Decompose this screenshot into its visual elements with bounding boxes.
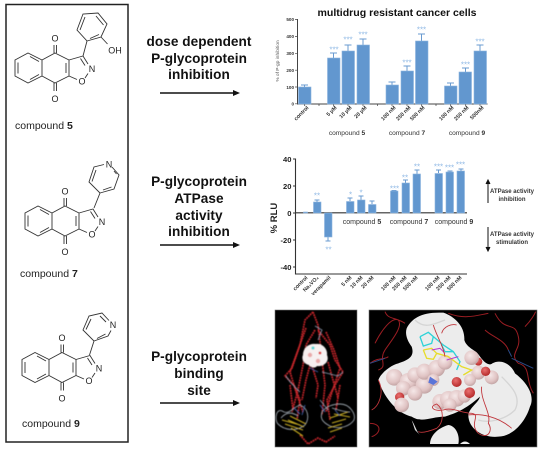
bar chart: multidrug resistant cancer cells: compound 9 <box>449 130 485 137</box>
bar chart: multidrug resistant cancer cells: *** <box>329 46 339 54</box>
bar chart: multidrug resistant cancer cells: 500nM <box>469 105 486 121</box>
bar chart: multidrug resistant cancer cells <box>275 17 488 137</box>
bar chart: ATPase activity % RLU: 100 nM <box>424 275 442 292</box>
heading: ATPase activity inhibition: P-glycoprotein <box>151 174 247 189</box>
bar chart: ATPase activity % RLU: ** <box>402 174 408 182</box>
arrow: to inhibition chart <box>160 90 240 96</box>
bar chart: ATPase activity % RLU: 500 nM <box>446 275 464 292</box>
molecule: compound 7: O <box>88 230 96 240</box>
bar chart: ATPase activity % RLU: Na₃VO₄ <box>302 275 321 293</box>
bar chart: ATPase activity % RLU: ** <box>325 246 332 254</box>
bar chart: multidrug resistant cancer cells: 250 nM <box>453 105 471 122</box>
molecule: compound 9: O <box>85 376 93 386</box>
bar chart: multidrug resistant cancer cells: 400 <box>286 34 294 39</box>
red backbone behind <box>370 312 536 437</box>
bar chart: ATPase activity % RLU: *** <box>445 164 454 172</box>
heading: binding site: binding <box>174 366 224 381</box>
label: ATPase activity inhibition: ATPase activity <box>490 189 535 195</box>
molecule: compound 7 <box>25 160 119 257</box>
bar chart: multidrug resistant cancer cells: 500 nM <box>409 105 427 122</box>
bar chart: multidrug resistant cancer cells: compound 7 <box>389 130 425 137</box>
bar chart: multidrug resistant cancer cells: *** <box>402 58 412 68</box>
label: compound 5: compound 5 <box>15 120 73 132</box>
bar chart: ATPase activity % RLU: *** <box>390 184 399 194</box>
molecule: compound 7: N <box>106 160 112 170</box>
bar chart: multidrug resistant cancer cells: *** <box>343 36 353 44</box>
molecule: compound 5: OH <box>108 46 122 56</box>
bar chart: ATPase activity % RLU: 500 nM <box>402 275 420 292</box>
chart title: multidrug resistant cancer cells <box>318 8 477 19</box>
heading: ATPase activity inhibition: activity <box>175 208 223 223</box>
bar chart: ATPase activity % RLU: * <box>349 190 352 200</box>
arrow: ATPase inhibition up <box>486 180 490 203</box>
label: compound 7: compound 7 <box>20 268 78 280</box>
label: compound 9: compound 9 <box>22 418 80 430</box>
arrow: ATPase stimulation down <box>486 227 490 251</box>
bar chart: multidrug resistant cancer cells: *** <box>461 60 470 70</box>
bar chart: multidrug resistant cancer cells: 20 µM <box>353 105 369 120</box>
bar chart: multidrug resistant cancer cells: 100 nM <box>380 105 398 122</box>
panel: binding site close-up <box>369 310 537 447</box>
bar chart: multidrug resistant cancer cells: 200 <box>286 68 294 73</box>
bar chart: multidrug resistant cancer cells: compound 5 <box>329 130 365 137</box>
bar chart: ATPase activity % RLU: *** <box>456 160 465 170</box>
bar chart: ATPase activity % RLU: * <box>359 188 363 198</box>
bar chart: multidrug resistant cancer cells: 100 <box>286 85 294 90</box>
bar chart: multidrug resistant cancer cells: *** <box>417 26 426 34</box>
label: ATPase activity stimulation: ATPase activity <box>490 232 535 238</box>
heading: binding site: site <box>187 383 211 398</box>
ligand sticks <box>420 332 460 370</box>
bar chart: ATPase activity % RLU: ** <box>314 192 320 200</box>
bar chart: ATPase activity % RLU: compound 5 <box>343 219 381 226</box>
heading: dose dependent inhibition: dose dependent <box>147 34 252 49</box>
bar chart: ATPase activity % RLU: 250 nM <box>391 275 409 292</box>
bar chart: ATPase activity % RLU: 100 nM <box>380 275 398 292</box>
molecule: compound 7: O <box>61 186 69 196</box>
molecule: compound 5: N <box>89 64 95 74</box>
y axis title: % RLU <box>269 203 280 233</box>
bar chart: ATPase activity % RLU: 250 nM <box>435 275 453 292</box>
heading: dose dependent inhibition: inhibition <box>168 67 230 82</box>
heading: binding site: P-glycoprotein <box>151 349 247 364</box>
molecule: compound 9: N <box>96 364 102 374</box>
bar chart: multidrug resistant cancer cells: 500 <box>286 17 294 22</box>
bar chart: multidrug resistant cancer cells: 300 <box>286 51 294 56</box>
panel: full protein structure <box>275 310 357 447</box>
red backbone in front <box>372 325 512 436</box>
bar chart: multidrug resistant cancer cells: control <box>293 105 311 122</box>
bar chart: ATPase activity % RLU: control <box>292 275 310 292</box>
molecule: compound 7: N <box>99 217 105 227</box>
bar chart: multidrug resistant cancer cells: 10 µM <box>338 105 354 120</box>
arrow: to ATPase chart <box>160 242 240 248</box>
label: ATPase activity inhibition: inhibition <box>498 197 526 203</box>
bar chart: ATPase activity % RLU: verapamil <box>310 275 333 297</box>
molecule: compound 5: O <box>51 94 59 104</box>
heading: dose dependent inhibition: P-glycoprotein <box>151 51 247 66</box>
heading: ATPase activity inhibition: inhibition <box>168 224 230 239</box>
white surfaces <box>378 313 532 437</box>
bar chart: ATPase activity % RLU <box>269 155 473 297</box>
molecule: compound 9 <box>22 313 116 404</box>
bar chart: multidrug resistant cancer cells: 100 nM <box>438 105 456 122</box>
heading: ATPase activity inhibition: ATPase <box>174 191 224 206</box>
molecule: compound 5: O <box>51 34 59 44</box>
molecule: compound 9: O <box>58 394 66 404</box>
bar chart: multidrug resistant cancer cells: *** <box>475 38 485 46</box>
bar chart: ATPase activity % RLU: compound 9 <box>435 219 473 226</box>
bar chart: ATPase activity % RLU: 20 <box>283 182 292 191</box>
bar chart: ATPase activity % RLU: ** <box>414 162 420 172</box>
panel: compounds box <box>6 4 128 442</box>
y axis title: % of P-gp inhibition <box>275 40 281 82</box>
bar chart: multidrug resistant cancer cells: 0 <box>291 102 294 106</box>
molecule: compound 9: O <box>58 333 66 343</box>
molecule: compound 7: O <box>61 247 69 257</box>
bar chart: ATPase activity % RLU: 40 <box>283 155 292 164</box>
bar chart: ATPase activity % RLU: *** <box>434 162 443 172</box>
arrow: to binding site images <box>160 400 240 406</box>
bar chart: multidrug resistant cancer cells: 5 µM <box>326 105 339 118</box>
label: ATPase activity stimulation: stimulation <box>496 240 528 246</box>
bar chart: ATPase activity % RLU: 5 nM <box>340 275 354 288</box>
bar chart: multidrug resistant cancer cells: *** <box>358 30 368 40</box>
bar chart: ATPase activity % RLU: compound 7 <box>390 219 428 226</box>
molecule: compound 5: O <box>78 76 86 86</box>
bar chart: ATPase activity % RLU: -40 <box>281 263 292 272</box>
spheres <box>386 369 403 386</box>
molecule: compound 5 <box>15 13 122 104</box>
bar chart: ATPase activity % RLU: 10 nM <box>349 275 365 290</box>
bar chart: multidrug resistant cancer cells: 250 nM <box>395 105 413 122</box>
bar chart: ATPase activity % RLU: -20 <box>281 236 292 245</box>
bar chart: ATPase activity % RLU: 20 nM <box>360 275 376 290</box>
molecule: compound 9: N <box>110 320 116 330</box>
bar chart: ATPase activity % RLU: 0 <box>287 209 292 218</box>
